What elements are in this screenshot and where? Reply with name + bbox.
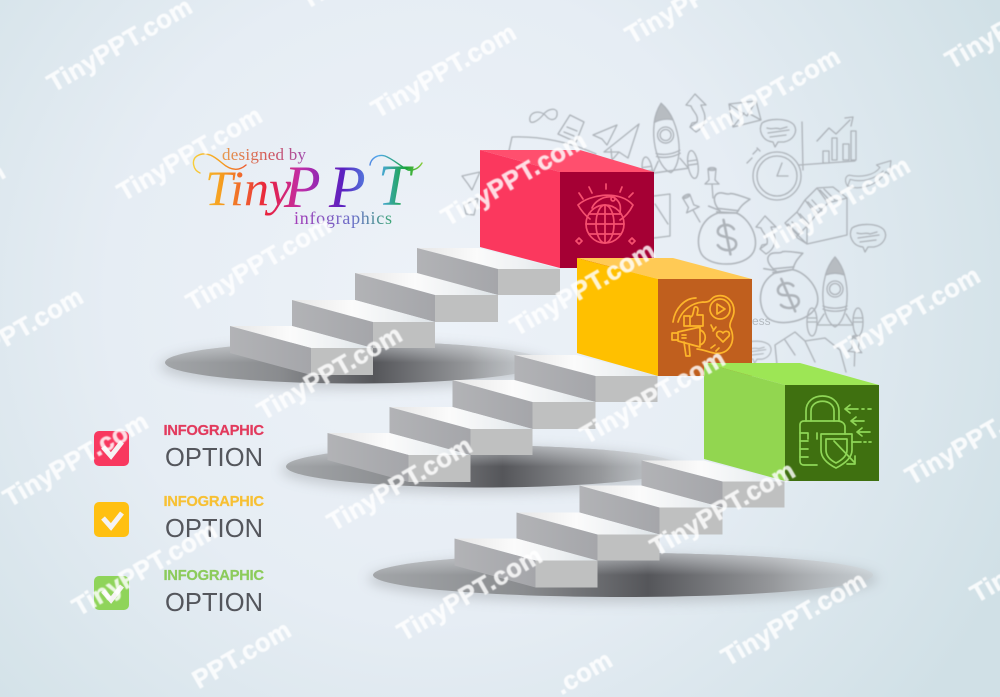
watermarks: TinyPPT.com bbox=[68, 516, 222, 622]
doodle: pins bbox=[705, 168, 719, 198]
doodle: up arrow bbox=[686, 94, 706, 132]
doodle: clock bbox=[753, 152, 801, 200]
doodle: arrow lower bbox=[756, 216, 776, 254]
red cube left face bbox=[480, 150, 560, 268]
doodle: speech bubble small bbox=[743, 341, 771, 363]
doodle word fragment: ess bbox=[752, 314, 771, 328]
doodle: infinity bbox=[530, 109, 557, 122]
doodle: envelope bbox=[729, 101, 761, 127]
watermarks: TinyPPT.com bbox=[367, 18, 521, 124]
step group three bbox=[454, 460, 784, 588]
red cube top face bbox=[480, 150, 654, 172]
icon: eye and globe bbox=[576, 184, 635, 244]
legend item: green: OPTION bbox=[165, 589, 263, 617]
red cube right face bbox=[560, 172, 654, 268]
icon: megaphone and social bbox=[672, 296, 734, 356]
yellow cube bbox=[577, 258, 752, 376]
step group one bbox=[230, 248, 560, 375]
watermarks: TinyPPT.com bbox=[691, 42, 845, 148]
logo: Tiny PPT script: P bbox=[328, 154, 366, 220]
watermarks: TinyPPT.com bbox=[506, 236, 660, 342]
watermarks: TinyPPT.com bbox=[437, 126, 591, 232]
doodle: speech bubble top bbox=[760, 119, 796, 147]
yellow check box bbox=[94, 502, 129, 537]
watermarks: TinyPPT.com bbox=[0, 407, 153, 513]
green cube right face bbox=[785, 385, 879, 481]
legend item: red: OPTION bbox=[165, 444, 263, 472]
doodle: note bbox=[558, 115, 584, 142]
watermarks: TinyPPT.com bbox=[253, 320, 407, 426]
logo: designed by: designed by bbox=[222, 145, 306, 164]
yellow cube top face bbox=[577, 258, 752, 279]
doodle: stairs bbox=[785, 187, 847, 244]
legend item: red bbox=[94, 423, 264, 472]
green cube top face bbox=[704, 363, 879, 385]
red label: INFOGRAPHIC bbox=[164, 423, 264, 439]
yellow cube right face bbox=[658, 279, 752, 376]
logo bbox=[193, 145, 422, 228]
step group two shadow bbox=[281, 446, 685, 493]
doodle: money bag one bbox=[698, 193, 756, 264]
yellow cube left face bbox=[577, 258, 658, 376]
legend item: green bbox=[94, 568, 264, 617]
step group two bbox=[328, 355, 658, 482]
doodle: speech bubble right bbox=[850, 224, 886, 252]
red check box bbox=[94, 431, 129, 466]
doodle: money bag two bbox=[751, 246, 822, 327]
watermarks: TinyPPT.com bbox=[182, 211, 336, 317]
logo: Tiny PPT script: T bbox=[378, 153, 414, 218]
watermarks: TinyPPT.com bbox=[646, 456, 800, 562]
doodle: bar chart bbox=[799, 117, 856, 170]
yellow label: INFOGRAPHIC bbox=[164, 494, 264, 510]
doodle: small plane lower bbox=[464, 198, 478, 215]
red cube bbox=[480, 150, 654, 268]
doodle: rocket one bbox=[633, 99, 700, 185]
step group one shadow bbox=[160, 342, 550, 389]
watermarks: TinyPPT.com bbox=[113, 101, 267, 207]
logo: infographics: infographics bbox=[294, 208, 392, 228]
icon: lock and shield bbox=[800, 396, 871, 468]
doodle: monitor bbox=[507, 137, 670, 238]
legend item: yellow bbox=[94, 494, 264, 543]
logo: Tiny PPT script: P bbox=[283, 154, 321, 220]
watermarks: TinyPPT.com bbox=[323, 431, 477, 537]
watermarks: TinyPPT.com bbox=[393, 541, 547, 647]
green cube left face bbox=[704, 363, 785, 481]
doodle: rocket two bbox=[807, 257, 863, 336]
doodle: curved arrow bbox=[846, 161, 891, 188]
doodle: small stairs bbox=[775, 332, 846, 372]
green label: INFOGRAPHIC bbox=[164, 568, 264, 584]
legend item: yellow: OPTION bbox=[165, 515, 263, 543]
step group three shadow bbox=[368, 553, 878, 603]
green cube bbox=[704, 363, 879, 481]
watermarks: TinyPPT.com bbox=[831, 261, 985, 367]
watermarks: PPT.com bbox=[188, 616, 296, 694]
doodle sketches background bbox=[462, 94, 891, 372]
watermarks: TinyPPT.com bbox=[717, 566, 871, 672]
logo: Tiny PPT script: Tiny bbox=[205, 160, 292, 216]
green check box bbox=[94, 576, 129, 610]
watermarks: TinyPPT.com bbox=[576, 344, 730, 450]
legend bbox=[94, 423, 264, 617]
logo: T swashes bbox=[193, 154, 422, 173]
doodle: small plane bbox=[462, 172, 480, 190]
doodle: paper planes bbox=[593, 124, 639, 160]
watermarks: TinyPPT.com bbox=[761, 151, 915, 257]
